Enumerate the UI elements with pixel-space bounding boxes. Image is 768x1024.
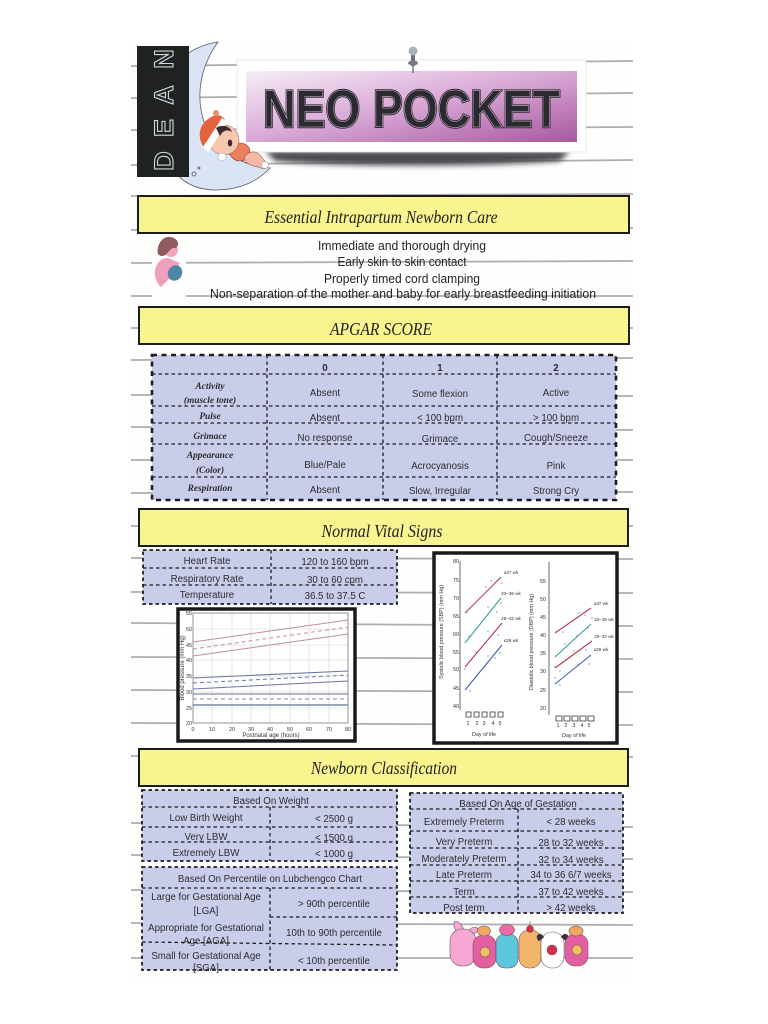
row labels: (muscle tone) [184,395,236,406]
chart axis labels: 60 [306,727,312,733]
table: based on age of gestation: 32 to 34 weeks [538,855,604,866]
panel: diastolic chart: 55 [540,579,546,585]
table values: Absent [310,388,340,399]
chart axis labels: 50 [287,727,293,733]
chart axis labels: 45 [186,643,192,649]
chart: systolic and diastolic pressure by day of life [434,553,617,743]
table: based on percentile: Large for Gestational Age [151,892,261,903]
panel: systolic chart: 2 [476,721,478,727]
table values: Acrocyanosis [411,461,469,472]
table: based on age of gestation: Late Preterm [436,870,492,881]
table: based on age of gestation: > 42 weeks [546,903,596,914]
moon craters [192,167,200,176]
title text: NEO POCKET [263,80,560,139]
baby [200,110,268,169]
character: magenta chick right [565,926,588,966]
table: based on weight: Low Birth Weight [169,813,243,824]
panel: systolic chart: ≥37 wk [504,570,519,575]
panel: diastolic chart: 1 [556,723,560,729]
panel: systolic chart: 55 [453,650,459,656]
icon: row of cute characters [450,921,588,968]
panel: systolic chart: 40 [453,704,459,710]
panel: diastolic chart [529,562,615,739]
panel: systolic chart: Day of life [472,732,496,738]
chart axis labels: 0 [192,727,194,733]
table values: Blue/Pale [304,460,346,471]
panel: systolic chart: 5 [498,721,502,727]
table: based on age of gestation: 28 to 32 weeks [538,838,604,849]
panel: systolic chart: 33–36 wk [501,591,522,596]
character: white dog [537,932,568,968]
table: based on weight: Very LBW [184,832,228,843]
chart axis labels: 40 [186,658,192,664]
panel: systolic chart: 70 [453,596,459,602]
row labels: Appearance [186,451,233,461]
table grid [152,355,616,500]
text block: intrapartum care steps: Properly timed cord clamping [324,271,480,286]
chart grid [193,613,348,723]
plaque: DEAN [137,46,189,177]
panel: diastolic chart: 40 [540,633,546,639]
chart axis labels: 20 [186,721,192,727]
column headers [322,363,559,374]
plaque: DEAN: N [149,49,179,69]
table values [298,388,588,497]
panel: diastolic chart: 50 [540,597,546,603]
chart axis labels: 25 [186,706,192,712]
panel: systolic chart: 1 [466,721,470,727]
table: based on percentile: Appropriate for Gestational [148,923,264,934]
panel: systolic chart: 75 [453,578,459,584]
panel: systolic chart: 50 [453,667,459,673]
panel: diastolic chart: 33–36 wk [594,617,615,622]
chart series [193,620,348,705]
heading: Normal Vital Signs: Normal Vital Signs [321,521,442,541]
table: APGAR score [152,355,616,500]
panel: systolic chart: 65 [453,614,459,620]
panel: diastolic chart: 45 [540,615,546,621]
table: based on percentile: Small for Gestational Age [151,951,261,962]
table values: Absent [310,413,340,424]
plaque: DEAN: A [149,85,179,105]
table: based on age of gestation: 34 to 36 6/7 weeks [530,870,612,881]
row labels: Pulse [199,412,221,422]
table: vital signs: 120 to 160 bpm [301,557,369,568]
panel: systolic chart: 45 [453,686,459,692]
panel: diastolic chart: ≥37 wk [594,601,609,606]
chart axis labels: 35 [186,674,192,680]
table: based on weight: < 1000 g [315,849,353,860]
panel: diastolic chart: 29–32 wk [594,634,615,639]
table: vital signs: Heart Rate [184,556,230,567]
chart axis labels [180,611,351,739]
table: vital signs: 36.5 to 37.5 C [305,591,365,602]
chart axis labels: 50 [186,627,192,633]
table values: Some flexion [412,389,468,400]
table: based on age of gestation: Extremely Preterm [424,817,504,828]
paper background [131,42,633,982]
table: vital signs [143,550,397,604]
chart axis labels: 30 [248,727,254,733]
heading: Normal Vital Signs [139,509,628,546]
panel: diastolic chart: 25 [540,688,546,694]
icon: push pin [408,46,418,73]
panel: systolic chart: 29–32 wk [501,616,522,621]
table: based on percentile: < 10th percentile [298,956,370,967]
table: based on age of gestation [410,793,623,914]
table values: > 100 bpm [533,413,579,424]
table: based on age of gestation: Moderately Preterm [421,854,507,865]
panel: systolic chart: 4 [492,721,494,727]
table: based on age of gestation: Post term [443,903,485,914]
text block: intrapartum care steps: Non-separation of the mother and baby for early breastfeeding initiation [210,286,596,301]
column headers: 0 [322,363,328,374]
table: based on age of gestation: Based On Age of Gestation [459,799,577,810]
panel: diastolic chart: 5 [588,723,590,729]
heading: Essential Intrapartum Newborn Care: Essential Intrapartum Newborn Care [264,207,498,227]
panel: diastolic chart: Day of life [562,733,586,739]
panel: systolic chart: 3 [482,721,486,727]
table: based on percentile: 10th to 90th percentile [286,928,382,939]
panel: systolic chart: 80 [453,559,459,565]
row labels: Respiration [187,484,232,494]
heading: Newborn Classification: Newborn Classification [310,758,457,778]
table: based on age of gestation: Term [453,887,475,898]
icon: mother and baby [152,234,186,300]
table values: Active [543,388,569,399]
table: based on age of gestation: Very Preterm [436,837,492,848]
table: based on weight [142,790,397,861]
banner card [237,60,586,152]
column headers: 1 [437,363,443,374]
chart axis labels: 40 [267,727,273,733]
chart axis labels: Postnatal age (hours) [242,733,300,739]
table: based on weight: < 2500 g [315,814,353,825]
table: based on percentile [142,867,397,974]
chart axis labels: 80 [345,727,351,733]
moon [170,42,270,190]
panel: diastolic chart: 35 [540,651,546,657]
text block: intrapartum care steps: Early skin to skin contact [338,254,467,269]
character: orange bear [519,921,541,968]
row labels [184,382,236,494]
row labels: (Color) [196,465,224,476]
chart axis labels: 30 [186,690,192,696]
table: based on weight: Extremely LBW [173,848,240,859]
panel: diastolic chart: 20 [540,706,546,712]
chart axis labels: 10 [209,727,215,733]
title text: NEO POCKET [263,80,560,139]
heading: APGAR score [139,307,629,344]
chart: blood pressure by postnatal age [178,609,355,741]
table: based on percentile: Based On Percentile on Lubchengco Chart [178,874,362,885]
character: pink bunny [450,921,478,966]
table values: Cough/Sneeze [524,433,588,444]
table: based on age of gestation: < 28 weeks [546,817,596,828]
heading: Newborn Classification [139,749,628,786]
banner gradient [246,71,577,142]
row labels: Grimace [193,432,227,442]
ruled paper lines [131,61,633,958]
text block: intrapartum care steps: Immediate and thorough drying [318,238,486,253]
banner shadow [265,151,570,166]
character: blue cat [496,924,518,968]
table: based on age of gestation: 37 to 42 weeks [538,887,604,898]
table: based on weight: Based On Weight [233,796,309,807]
panel: systolic chart: ≤28 wk [504,638,519,643]
table values: Pink [547,461,566,472]
character: magenta chick [473,926,496,968]
panel: diastolic chart: Diastolic blood pressure (DBP) (mm Hg) [529,594,535,690]
panel: systolic chart [439,559,522,738]
table: based on percentile: > 90th percentile [298,899,370,910]
chart axis labels: 55 [186,611,192,617]
row labels: Activity [194,382,225,392]
table: vital signs: 30 to 60 cpm [307,575,363,586]
table values: < 100 bpm [417,413,463,424]
table: based on percentile: Age [AGA] [183,936,229,947]
table values: Absent [310,485,340,496]
table: based on percentile: [SGA] [193,963,219,974]
plaque: DEAN: D [149,151,179,171]
panel: diastolic chart: ≤28 wk [594,647,609,652]
heading: Essential Intrapartum Newborn Care [138,196,629,233]
chart axis labels: Blood pressure (mm Hg) [180,635,186,701]
panel: systolic chart: 60 [453,632,459,638]
table: vital signs: Respiratory Rate [171,574,243,585]
table: based on percentile: [LGA] [194,906,218,917]
panel: systolic chart: Systolic blood pressure (SBP) (mm Hg) [439,585,445,679]
table values: Grimace [422,434,458,445]
title banner [237,46,586,166]
text block: intrapartum care steps [210,238,596,301]
table: based on weight: < 1500 g [315,833,353,844]
column headers: 2 [553,363,559,374]
panel: diastolic chart: 30 [540,669,546,675]
chart axis labels: 20 [229,727,235,733]
table values: No response [298,433,352,444]
logo: moon and sleeping baby [137,42,270,190]
table values: Strong Cry [533,486,579,497]
table: vital signs: Temperature [180,590,234,601]
panel: diastolic chart: 3 [572,723,576,729]
table values: Slow, Irregular [409,486,472,497]
panel: diastolic chart: 2 [564,723,568,729]
plaque: DEAN: E [149,119,179,137]
panel: diastolic chart: 4 [580,723,584,729]
heading: APGAR score: APGAR SCORE [329,319,432,339]
chart axis labels: 70 [326,727,332,733]
